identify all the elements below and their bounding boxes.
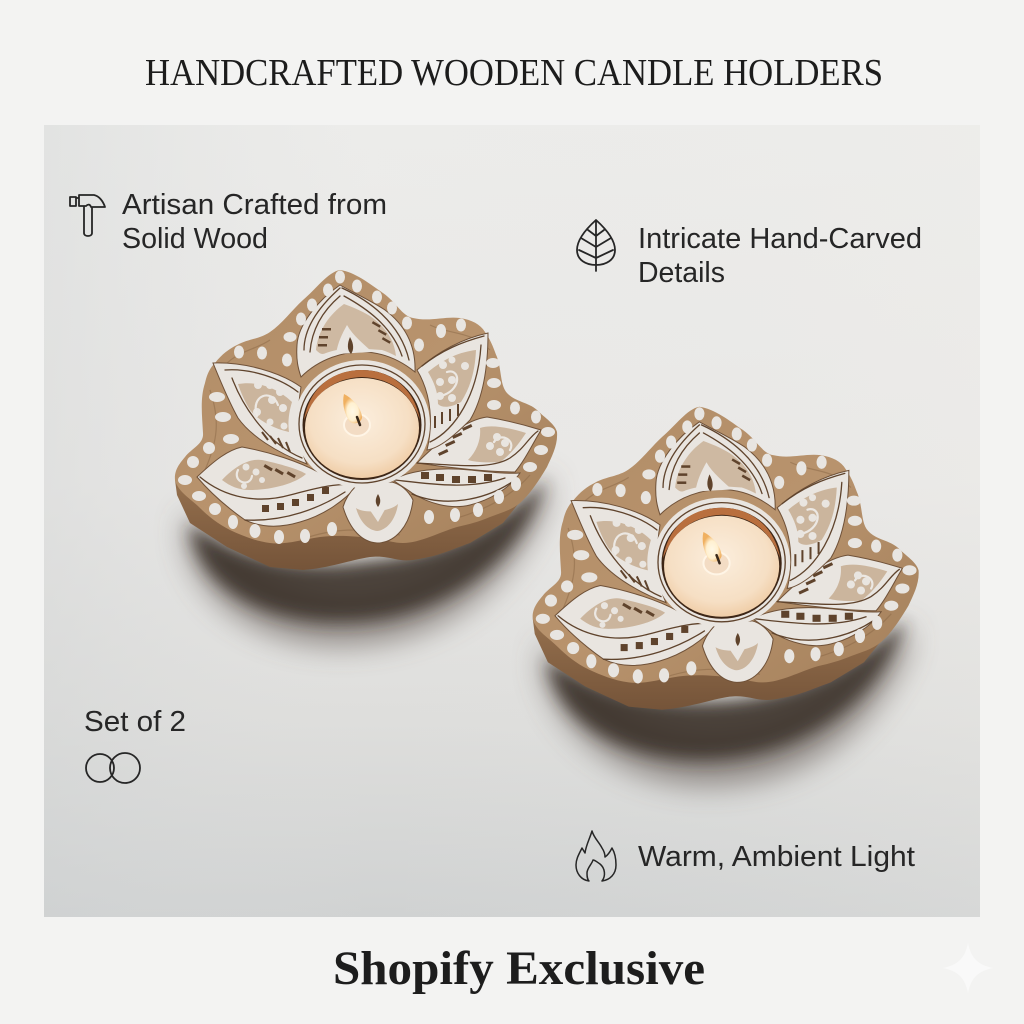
text: intricate hand-carved details: Details [638, 257, 725, 289]
icon: hammer [70, 195, 105, 236]
carved petal: top left [213, 363, 307, 464]
feature: artisan crafted [70, 189, 387, 255]
candle wick pool [344, 414, 370, 436]
carved petal: right [417, 417, 541, 472]
text: intricate hand-carved details: Intricate Hand-Carved [638, 223, 922, 255]
candle wax [305, 378, 419, 478]
feature: hand-carved details [577, 220, 922, 289]
icon: corner sparkle [943, 943, 993, 993]
candle holder: right [533, 407, 919, 710]
text: set of 2: Set of 2 [84, 706, 186, 738]
text: artisan crafted from solid wood: Artisan Crafted from [122, 189, 387, 221]
footer: shopify exclusive: Shopify Exclusive [333, 942, 705, 995]
carved petal: bottom right [393, 469, 520, 507]
carved petal: top [297, 285, 415, 377]
shadow: second holder [543, 620, 908, 785]
text: warm ambient light: Warm, Ambient Light [638, 841, 915, 873]
icon: two rings [86, 753, 140, 783]
wood grain [205, 325, 530, 540]
carved motif: bottom centre paisley [343, 482, 413, 543]
tea light recess ring [294, 360, 430, 488]
carved petal: bottom left [197, 447, 358, 526]
carved petal: top right [417, 333, 488, 450]
holder top face [175, 270, 557, 543]
title: HANDCRAFTED WOODEN CANDLE HOLDERS [145, 52, 883, 94]
holder side wall [175, 450, 547, 570]
panel: product photo backdrop [44, 125, 980, 917]
candle holder: left [175, 270, 557, 570]
candle flame [343, 394, 362, 425]
feature: set of 2 [84, 706, 186, 783]
feature: warm ambient light [576, 831, 915, 881]
icon: flame [576, 831, 616, 881]
icon: leaf [577, 220, 615, 271]
shadow: first holder [186, 470, 548, 645]
decorative dots border [178, 270, 555, 544]
text: artisan crafted from solid wood: Solid Wood [122, 223, 268, 255]
